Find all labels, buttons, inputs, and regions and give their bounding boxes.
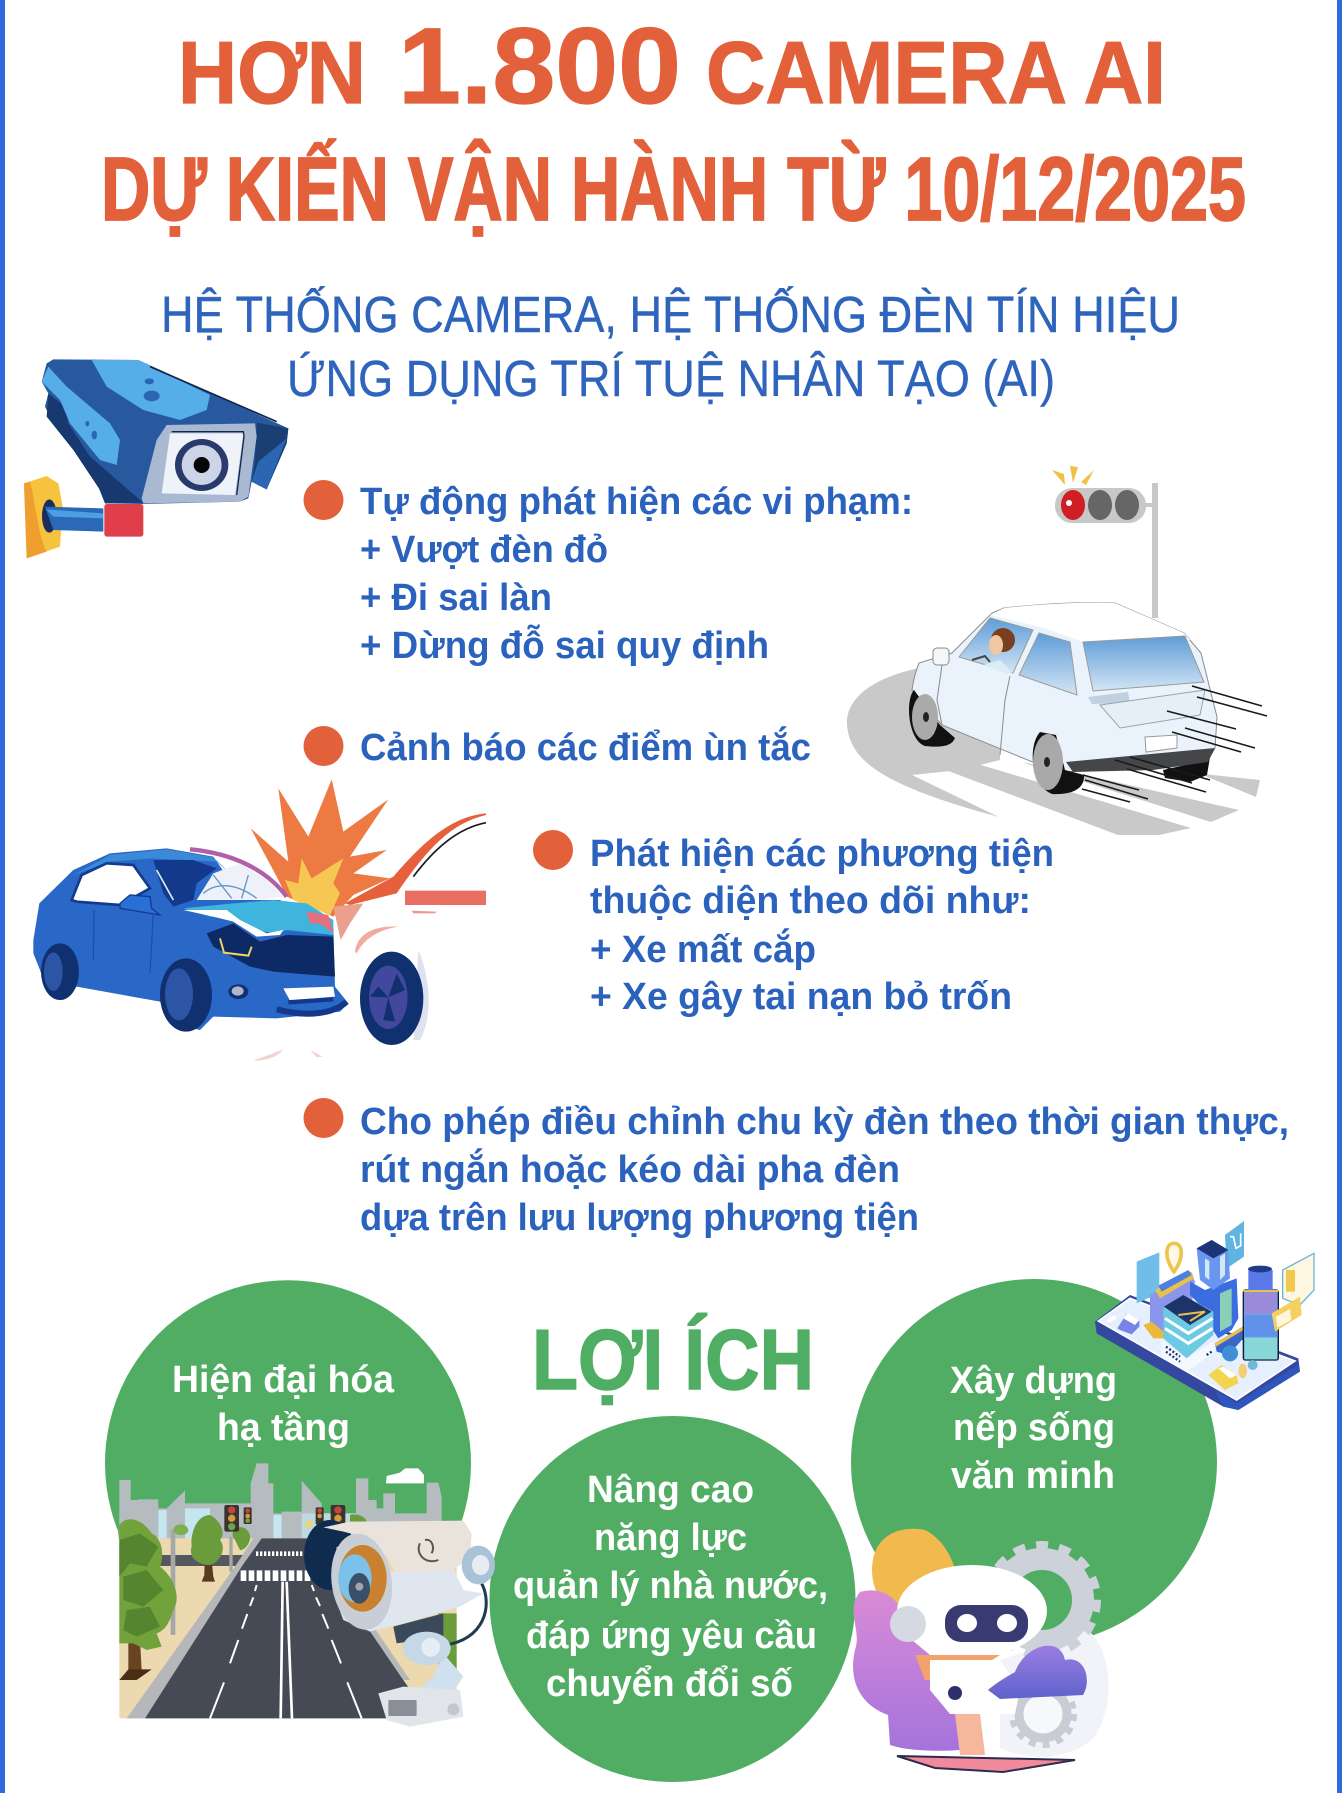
illustration: smart city on phone [1095, 1221, 1314, 1410]
bullet 1: violations: + Dừng đỗ sai quy định [360, 623, 769, 667]
panel: state management capacity: Nâng cao [587, 1469, 754, 1511]
bullet 4: signal cycle: Cho phép điều chỉnh chu kỳ đèn theo thời gian thực, [360, 1101, 1289, 1143]
title [101, 5, 1246, 240]
bullet 3: monitored vehicles: Phát hiện các phương tiện [590, 833, 1054, 875]
panel: modern infrastructure: Hiện đại hóa [172, 1359, 395, 1401]
bullet 4: signal cycle [304, 1098, 1289, 1239]
panel: state management capacity: quản lý nhà nước, [513, 1565, 828, 1607]
bullet 1: violations: Tự động phát hiện các vi phạm: [360, 481, 913, 523]
panel: state management capacity [490, 1416, 856, 1782]
icon: crashed blue car [33, 779, 486, 1061]
panel: civilized lifestyle [851, 1221, 1314, 1772]
panel: modern infrastructure: hạ tầng [217, 1407, 350, 1449]
bullet 2: congestion: Cảnh báo các điểm ùn tắc [360, 725, 811, 769]
panel: civilized lifestyle: nếp sống [953, 1407, 1115, 1449]
bullet 4: signal cycle: dựa trên lưu lượng phương tiện [360, 1197, 919, 1239]
icon: security camera [24, 359, 288, 558]
bullet 3: monitored vehicles: + Xe mất cắp [590, 927, 816, 971]
panel: civilized lifestyle: văn minh [951, 1455, 1115, 1497]
panel: state management capacity: đáp ứng yêu cầu [526, 1615, 817, 1657]
subtitle: HỆ THỐNG CAMERA, HỆ THỐNG ĐÈN TÍN HIỆU [161, 285, 1180, 343]
bullet 3: monitored vehicles: thuộc diện theo dõi như: [590, 880, 1031, 922]
bullet 4: signal cycle: rút ngắn hoặc kéo dài pha đèn [360, 1147, 900, 1191]
panel: state management capacity: chuyển đổi số [546, 1663, 793, 1705]
heading: benefits: LỢI ÍCH [532, 1313, 814, 1408]
icon: traffic light and white car [847, 466, 1267, 835]
subtitle [161, 285, 1180, 407]
illustration: AI robot [853, 1529, 1109, 1772]
subtitle: ỨNG DỤNG TRÍ TUỆ NHÂN TẠO (AI) [287, 350, 1055, 407]
panel: state management capacity: năng lực [594, 1517, 747, 1559]
bullet 1: violations: + Đi sai làn [360, 577, 552, 619]
bullet 3: monitored vehicles: + Xe gây tai nạn bỏ trốn [590, 976, 1012, 1018]
illustration: road with trees and city [119, 1463, 457, 1718]
illustration: white CCTV camera [304, 1520, 495, 1727]
panel: modern infrastructure [105, 1280, 495, 1727]
panel: civilized lifestyle: Xây dựng [950, 1360, 1117, 1402]
bullet 1: violations [304, 480, 913, 667]
bullet 3: monitored vehicles [533, 830, 1054, 1018]
title: CAMERA AI [706, 23, 1166, 122]
bullet 1: violations: + Vượt đèn đỏ [360, 529, 608, 571]
title: HƠN [178, 23, 366, 122]
title: 1.800 [398, 5, 681, 126]
